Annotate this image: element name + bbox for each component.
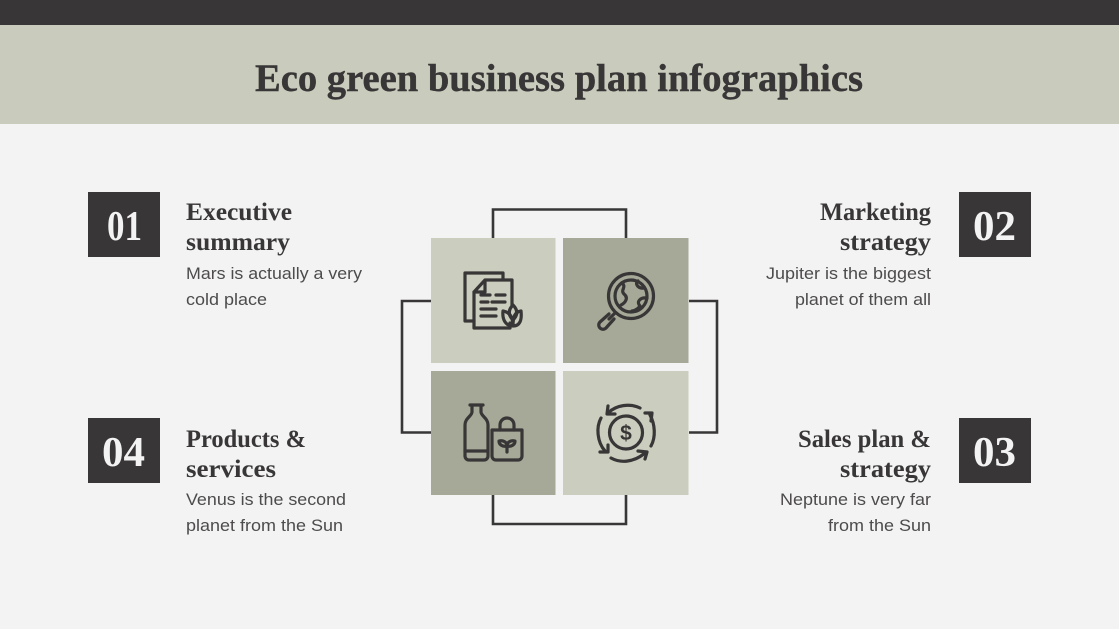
- description: [186, 490, 346, 535]
- description: [766, 264, 931, 309]
- description: planet from the Sun: [186, 516, 343, 535]
- heading: Products &: [186, 426, 306, 453]
- icon: magnifier over globe: [599, 274, 654, 329]
- description: planet of them all: [795, 290, 931, 309]
- icon: bottle and shopping bag: [465, 405, 522, 460]
- heading: summary: [186, 229, 291, 256]
- panel: sales plan tile: [563, 371, 688, 495]
- panel: marketing strategy tile: [563, 238, 688, 363]
- heading: strategy: [840, 229, 932, 256]
- block 03: sales plan and strategy: [780, 418, 1031, 535]
- description: [186, 264, 363, 309]
- panel: products and services tile: [431, 371, 556, 495]
- number badge 02: [959, 192, 1031, 257]
- top dark band: [0, 0, 1119, 25]
- number badge 04: [88, 418, 160, 483]
- connector: top bracket: [493, 210, 626, 238]
- number badge 03: 03: [973, 430, 1016, 476]
- number badge 01: 01: [107, 204, 142, 250]
- title: Eco green business plan infographics: [255, 57, 863, 100]
- connector: bottom bracket: [493, 495, 626, 524]
- description: Mars is actually a very: [186, 264, 363, 283]
- dollar sign: $: [620, 422, 632, 445]
- connector: right bracket: [689, 301, 717, 432]
- icon: dollar coin with cycle arrows: [598, 405, 654, 461]
- panel: executive summary tile: [431, 238, 556, 363]
- block 02: marketing strategy: [766, 192, 1031, 309]
- heading: Executive: [186, 199, 292, 226]
- description: [780, 490, 931, 535]
- description: cold place: [186, 290, 267, 309]
- heading: Marketing: [820, 199, 931, 226]
- description: Neptune is very far: [780, 490, 931, 509]
- number badge 03: [959, 418, 1031, 483]
- icon: documents with leaf: [465, 273, 521, 328]
- title banner: [0, 25, 1119, 124]
- block 01: executive summary: [88, 192, 363, 309]
- heading: Sales plan &: [798, 426, 931, 453]
- block 04: products and services: [88, 418, 346, 535]
- number badge 04: 04: [102, 430, 145, 476]
- description: Venus is the second: [186, 490, 346, 509]
- description: from the Sun: [828, 516, 931, 535]
- heading: [798, 426, 932, 483]
- number badge 01: [88, 192, 160, 257]
- description: Jupiter is the biggest: [766, 264, 931, 283]
- heading: [186, 199, 292, 256]
- heading: [186, 426, 306, 483]
- number badge 02: 02: [973, 204, 1016, 250]
- heading: services: [186, 456, 276, 483]
- heading: [820, 199, 932, 256]
- connector: left bracket: [402, 301, 431, 432]
- heading: strategy: [840, 456, 932, 483]
